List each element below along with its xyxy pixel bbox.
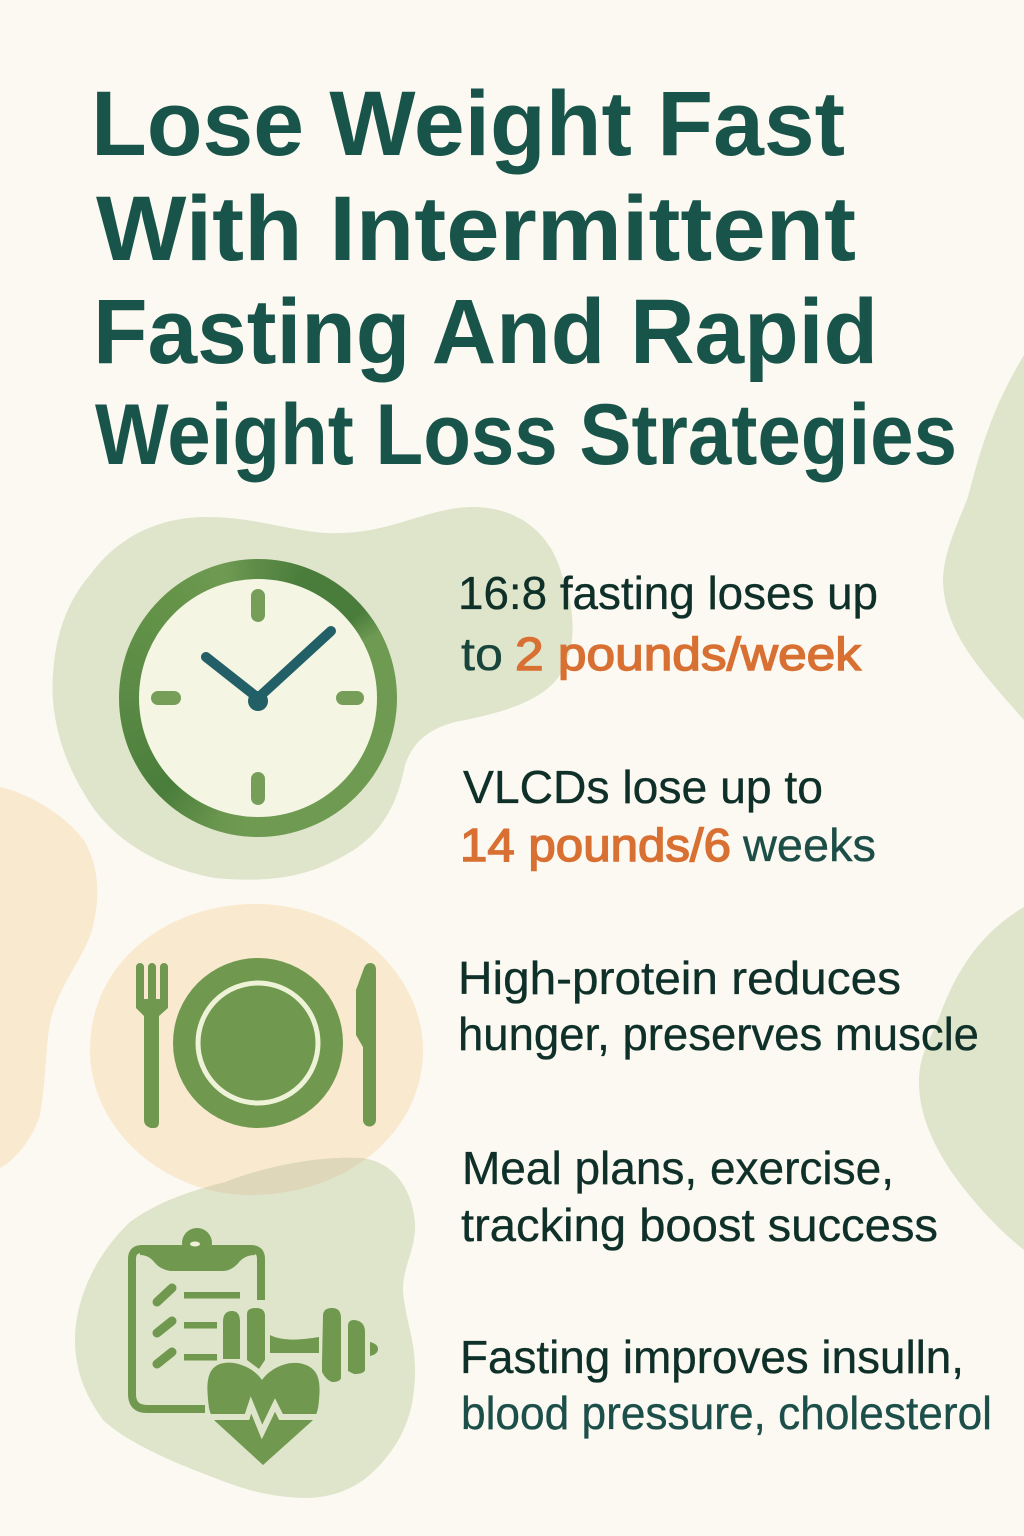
text block: 16:8 fasting (458, 567, 878, 680)
clipboard (132, 1228, 261, 1409)
text block: fasting benefits (460, 1331, 992, 1439)
text block: fasting benefits: blood pressure, cholesterol (461, 1387, 992, 1439)
icon: clock face (139, 579, 377, 817)
dumbbell (223, 1308, 378, 1382)
text block: meal plans (461, 1142, 938, 1251)
background blob: left peach (0, 787, 97, 1168)
text block: meal plans: tracking boost success (461, 1199, 938, 1251)
text block: high-protein: High-protein reduces (458, 952, 901, 1004)
text block: 16:8 fasting: 2 pounds/week (515, 628, 862, 680)
title (91, 73, 957, 483)
title: Weight Loss Strategies (95, 387, 957, 483)
title: Lose Weight Fast (91, 73, 845, 175)
text block: VLCDs: 14 pounds/6 (460, 819, 731, 871)
background blob: upper right (943, 355, 1024, 720)
icon: checklist, dumbbell and heart (132, 1228, 378, 1465)
text block: VLCDs: VLCDs lose up to (463, 761, 823, 813)
text block: fasting benefits: Fasting improves insulln, (460, 1331, 964, 1383)
text block: 16:8 fasting: 16:8 fasting loses up (458, 567, 878, 619)
text block: VLCDs: weeks (742, 819, 876, 871)
blob behind plate (90, 904, 423, 1195)
heart with pulse line (203, 1363, 324, 1465)
text block: VLCDs (460, 761, 876, 871)
text block: meal plans: Meal plans, exercise, (462, 1142, 894, 1194)
text block: high-protein: hunger, preserves muscle (458, 1008, 979, 1060)
title: With Intermittent (96, 178, 856, 280)
background blob: lower right (919, 907, 1024, 1250)
text block: high-protein (458, 952, 979, 1060)
blob behind checklist (75, 1158, 415, 1498)
blob behind clock (52, 507, 573, 880)
title: Fasting And Rapid (93, 281, 878, 383)
icon: clock ring (119, 559, 397, 837)
text block: 16:8 fasting: to (461, 628, 503, 680)
icon: plate and cutlery (136, 958, 376, 1128)
blob overlap (203, 1158, 366, 1195)
